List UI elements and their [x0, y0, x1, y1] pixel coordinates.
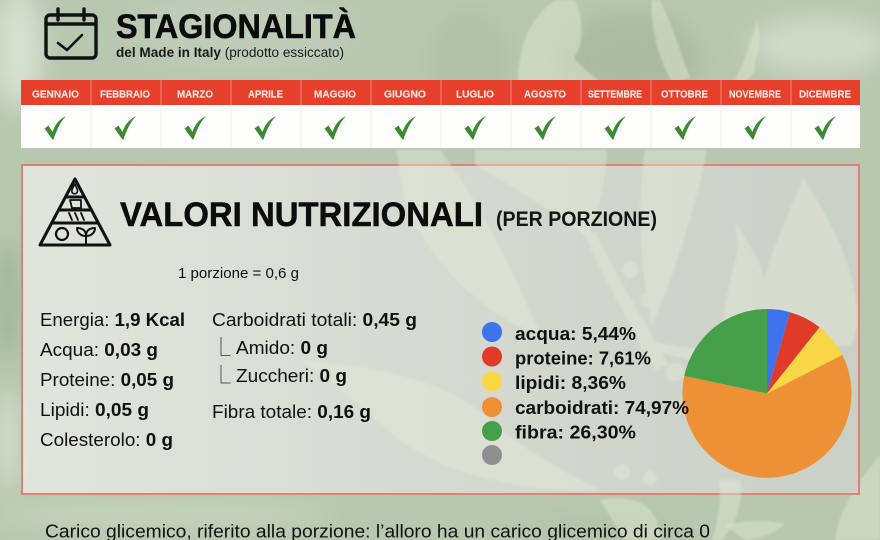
pie legend: proteine: 7,61% [515, 348, 651, 368]
pie legend: acqua: 5,44% [515, 323, 636, 344]
heading: Valori nutrizionali: VALORI NUTRIZIONALI [120, 196, 483, 234]
seasonality table: DICEMBRE [799, 88, 851, 100]
portion size: 1 porzione = 0,6 g [178, 265, 299, 282]
nutrient list: left column: Proteine: 0,05 g [40, 369, 174, 390]
nutrient list: right column: Amido: 0 g [236, 337, 328, 358]
nutrient list: left column: Acqua: 0,03 g [40, 339, 158, 360]
seasonality table: APRILE [248, 88, 283, 100]
seasonality table: LUGLIO [456, 88, 494, 100]
subtitle: del Made in Italy (prodotto essiccato) [116, 45, 344, 60]
seasonality table: MARZO [177, 88, 213, 100]
seasonality table: OTTOBRE [661, 88, 708, 100]
seasonality table: GIUGNO [384, 88, 426, 100]
pie chart [682, 309, 851, 478]
pie legend [482, 322, 689, 465]
seasonality table: MAGGIO [314, 88, 356, 100]
nutrient list: right column: Zuccheri: 0 g [236, 365, 347, 386]
nutrient list: left column: Colesterolo: 0 g [40, 429, 173, 450]
title: Stagionalità: STAGIONALITÀ [116, 8, 356, 46]
icon: food pyramid [40, 179, 110, 245]
nutrient list: left column: Lipidi: 0,05 g [40, 399, 149, 420]
panel: nutritional values [22, 150, 859, 540]
nutrient list: left column: Energia: 1,9 Kcal [40, 309, 185, 330]
nutrient list: right column: Fibra totale: 0,16 g [212, 401, 371, 422]
seasonality table: AGOSTO [524, 88, 566, 100]
seasonality table: GENNAIO [32, 88, 79, 100]
nutrient list: right column [212, 309, 417, 422]
pie legend: fibra: 26,30% [515, 422, 636, 442]
nutrient list: right column: Carboidrati totali: 0,45 g [212, 309, 417, 330]
seasonality table [21, 80, 860, 148]
pie legend: lipidi: 8,36% [515, 372, 626, 393]
seasonality table: SETTEMBRE [588, 88, 642, 100]
pie legend: carboidrati: 74,97% [515, 397, 689, 418]
heading note: per porzione: (PER PORZIONE) [496, 208, 657, 231]
nutrient list: left column [40, 309, 185, 450]
seasonality table: NOVEMBRE [729, 88, 781, 100]
seasonality table: FEBBRAIO [100, 88, 150, 100]
icon: calendar [46, 9, 96, 58]
